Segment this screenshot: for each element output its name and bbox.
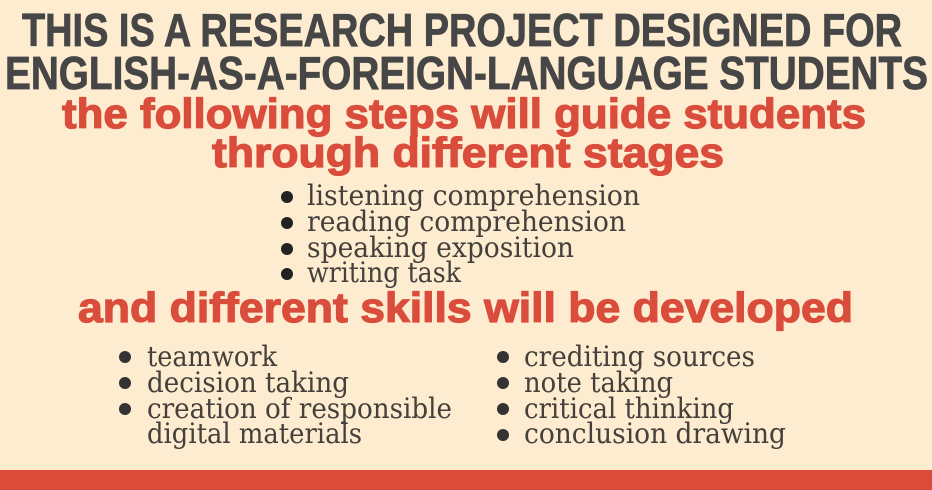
- subtitle: steps: through different stages: [212, 129, 724, 176]
- list: stages: reading comprehension: [307, 205, 626, 238]
- list: skills right: crediting sources: [524, 340, 755, 373]
- list: skills left: [119, 340, 452, 450]
- list: stages: speaking exposition: [307, 231, 574, 264]
- subtitle: steps: [62, 90, 866, 176]
- list: skills right: [497, 340, 786, 450]
- subtitle: steps: the following steps will guide students: [62, 90, 866, 137]
- subtitle: skills: and different skills will be developed: [78, 284, 853, 331]
- list: skills left: decision taking: [147, 366, 349, 399]
- list: stages: writing task: [307, 256, 462, 289]
- list: skills left: teamwork: [147, 340, 278, 373]
- list: stages: [281, 179, 640, 289]
- list: skills left: creation of responsible: [147, 392, 452, 425]
- list: skills left: digital materials: [147, 417, 362, 450]
- list: skills right: note taking: [524, 366, 673, 399]
- list: skills right: critical thinking: [524, 392, 734, 425]
- list: skills right: conclusion drawing: [524, 417, 786, 450]
- list: stages: listening comprehension: [307, 179, 640, 212]
- bottom bar: [0, 470, 932, 490]
- title: [5, 4, 928, 99]
